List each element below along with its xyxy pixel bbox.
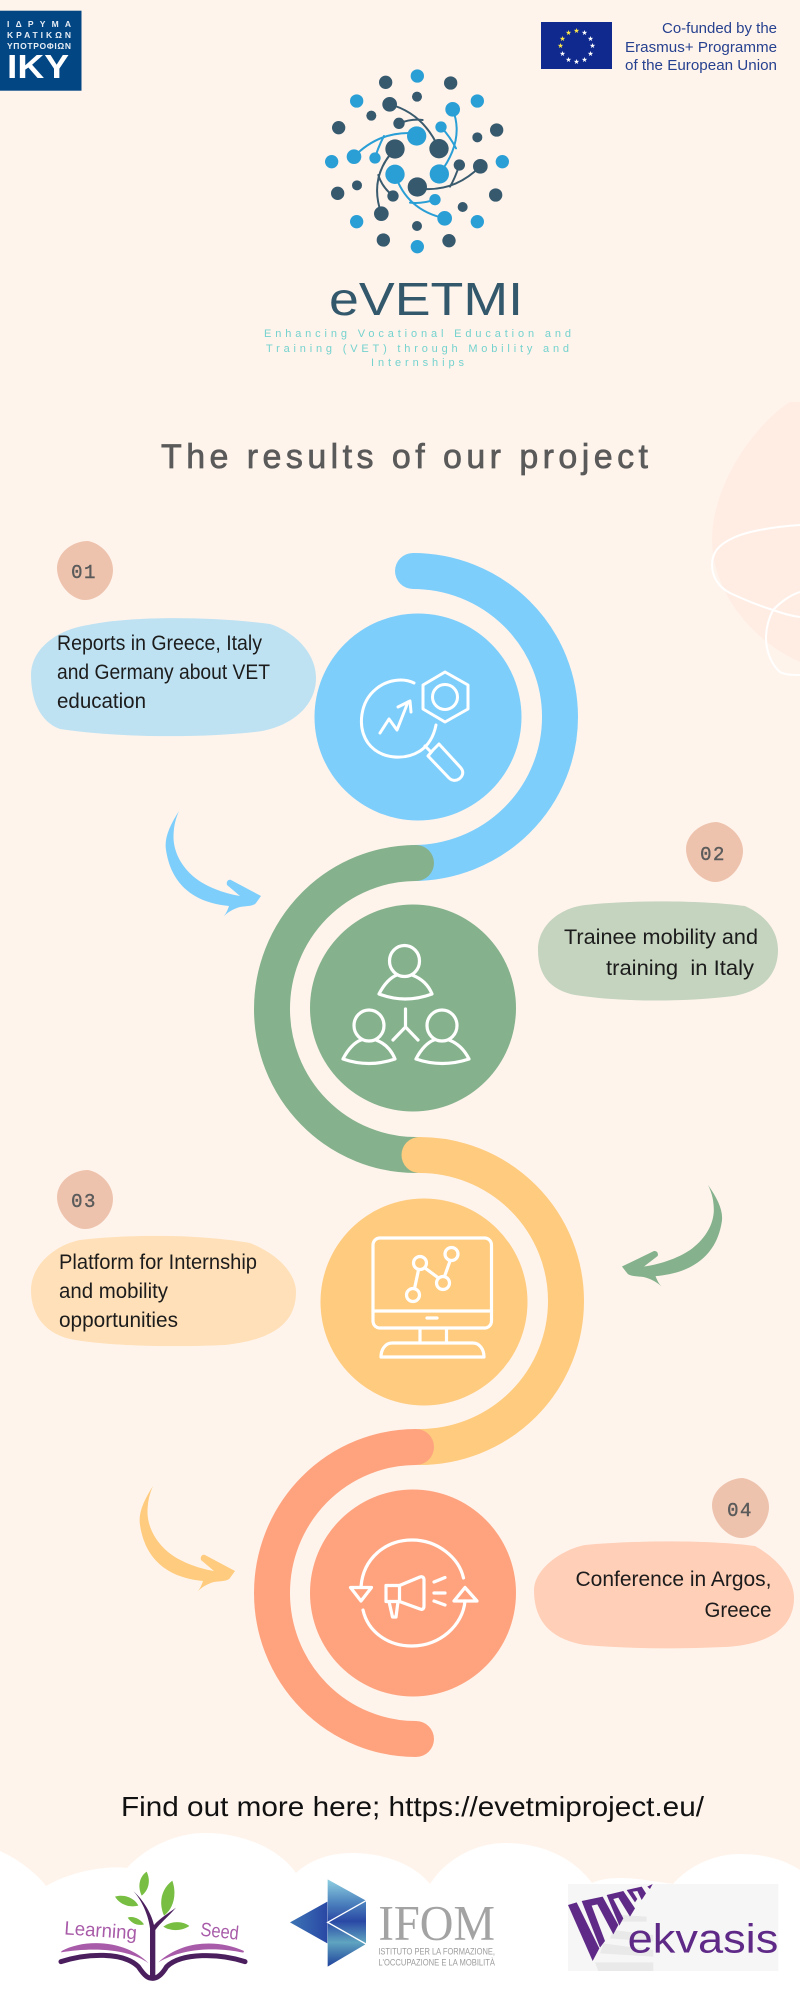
arc: green step 2 (272, 863, 416, 1155)
arc: blue step 1 (413, 571, 560, 863)
callout: step 3 text (31, 1236, 296, 1346)
eVETMI logo mark (325, 69, 509, 253)
panel: step 3 circle with icon (320, 1198, 528, 1406)
icon: EU flag: ★ (573, 58, 580, 66)
EU co-funding badge (541, 20, 777, 74)
icon: monitor with line chart (373, 1238, 492, 1357)
logo: IFOM (290, 1879, 496, 1967)
icon: EU flag: ★ (581, 29, 588, 37)
icon: EU flag (541, 22, 612, 69)
icon: three connected people (343, 946, 469, 1064)
callout: step 1 text: Reports in Greece, Italy (57, 632, 262, 655)
IKY logo (0, 11, 82, 91)
callout: step 1 text (31, 618, 316, 736)
callout: step 4 text: Greece (704, 1599, 772, 1622)
logo: Learning Seed (61, 1872, 245, 1978)
icon: EU flag: ★ (565, 56, 572, 64)
number badge 04 (712, 1478, 769, 1538)
logo: Learning Seed: Learning (64, 1918, 138, 1944)
logo: ekvasis (568, 1884, 778, 1971)
number badge 01 (57, 541, 113, 600)
callout: step 4 text: Conference in Argos, (576, 1568, 772, 1591)
logo tagline: Internships (371, 357, 464, 369)
logo tagline (264, 328, 571, 369)
arc: yellow step 3 (420, 1155, 566, 1447)
IKY logo: ΙΔΡΥΜΑ (7, 19, 71, 29)
icon: EU flag: ★ (589, 42, 596, 50)
arc: orange step 4 (272, 1447, 416, 1739)
title: The results of our project (161, 438, 649, 476)
number badge 03 (57, 1170, 113, 1229)
decorative background blob (712, 402, 800, 675)
icon: EU flag: ★ (587, 50, 594, 58)
panel: step 1 circle with icon (314, 614, 522, 820)
callout: step 2 text: training in Italy (606, 957, 755, 980)
arrow: blue (166, 811, 261, 917)
callout: step 4 text (534, 1541, 794, 1648)
EU badge text: Co-funded by the (662, 20, 777, 37)
number badge 02 (686, 822, 743, 882)
white cloud footer (0, 1833, 800, 2000)
IKY logo: ΥΠΟΤΡΟΦΙΩΝ (7, 41, 71, 51)
panel: step 2 circle with icon (310, 904, 516, 1112)
IKY logo: ΚΡΑΤΙΚΩΝ (7, 30, 71, 40)
logo tagline: Enhancing Vocational Education and (264, 328, 571, 340)
panel: step 4 circle with icon (310, 1490, 516, 1696)
callout: step 2 text: Trainee mobility and (564, 926, 758, 949)
EU badge text (625, 20, 777, 74)
icon: EU flag: ★ (581, 56, 588, 64)
callout: step 3 text: Platform for Internship (59, 1251, 257, 1274)
logo: IFOM: IFOM (378, 1894, 495, 1950)
number badge 03: 03 (71, 1191, 97, 1213)
icon: EU flag: ★ (559, 50, 566, 58)
icon: EU flag: ★ (587, 35, 594, 43)
link text: Find out more here; https://evetmiproject.eu/ (121, 1791, 704, 1822)
logo: Learning Seed: Seed (199, 1920, 240, 1945)
arrow: yellow (140, 1486, 235, 1592)
callout: step 3 text: and mobility (59, 1280, 168, 1303)
arrow: green (622, 1185, 722, 1287)
callout: step 2 text (538, 901, 778, 1001)
EU badge text: of the European Union (625, 57, 777, 74)
logo: IFOM: L'OCCUPAZIONE E LA MOBILITÀ (378, 1957, 496, 1967)
callout: step 1 text: and Germany about VET (57, 661, 270, 684)
logo: ekvasis: ekvasis (628, 1915, 778, 1961)
icon: magnifier with chart and hexagon (361, 672, 468, 780)
number badge 02: 02 (700, 844, 726, 866)
icon: EU flag: ★ (557, 42, 564, 50)
number badge 01: 01 (71, 562, 97, 584)
logo tagline: Training (VET) through Mobility and (266, 343, 569, 355)
IKY logo: IKY (7, 48, 69, 85)
callout: step 3 text: opportunities (59, 1309, 178, 1332)
callout: step 1 text: education (57, 690, 146, 713)
icon: EU flag: ★ (565, 29, 572, 37)
number badge 04: 04 (727, 1500, 753, 1522)
logo: IFOM: ISTITUTO PER LA FORMAZIONE, (378, 1947, 495, 1957)
icon: EU flag: ★ (573, 27, 580, 35)
icon: megaphone in circular arrows (350, 1540, 477, 1646)
EU badge text: Erasmus+ Programme (625, 39, 777, 56)
icon: EU flag: ★ (559, 35, 566, 43)
logo wordmark: eVETMI (329, 273, 523, 325)
